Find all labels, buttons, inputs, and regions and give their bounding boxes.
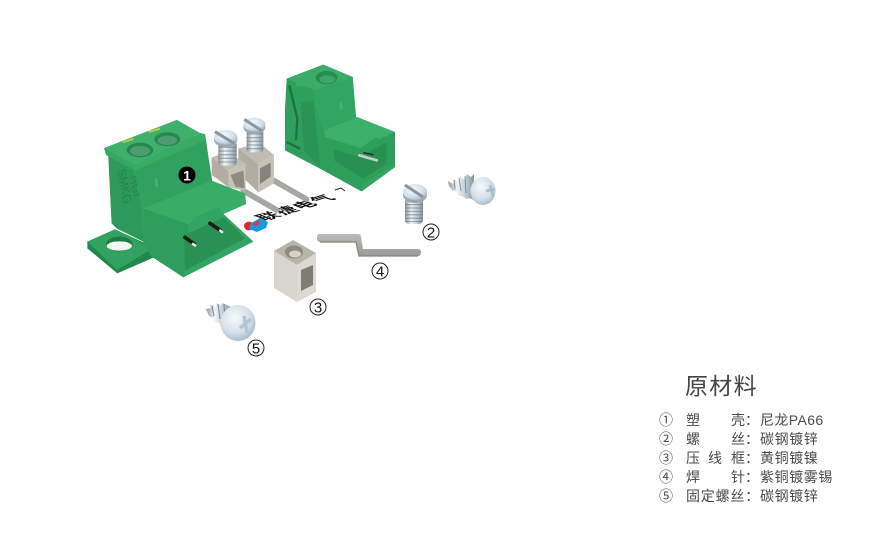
row 4 [659,469,833,485]
exploded terminal block view [87,65,496,358]
row 4: 焊 [686,469,700,485]
side face [108,155,143,242]
cage clamp right [238,143,274,192]
row 5 [659,488,818,504]
row 1: 塑 [686,412,700,428]
watermark logo [244,188,345,232]
shelf [324,117,395,148]
materials list [659,412,833,504]
front face [313,77,356,130]
row 2: 丝： [731,431,759,447]
part 3 marker: 3 [314,300,322,316]
row 2 [659,431,818,447]
row 1: ① [659,412,673,428]
top face [287,65,353,90]
tapping screw top right [448,174,496,205]
row 3: 压 [686,450,700,466]
row 2: ② [659,431,673,447]
top face [104,120,200,165]
part 3 marker [310,299,326,316]
row 5: 碳钢镀锌 [760,488,818,504]
part 1 marker [178,166,196,184]
row 2: 碳钢镀锌 [760,431,818,447]
tapping screw lower (part 5) [206,303,256,341]
pins [185,223,221,244]
cage clamp left [212,152,246,191]
part 2 marker: 2 [427,224,435,242]
rear metal parts in zoom frame [212,118,307,210]
socket [184,214,253,277]
slotted screw left [214,130,237,166]
heading: 原材料 [685,373,758,399]
green connector left (part 1) [87,120,253,277]
cutaway channel [301,101,321,169]
part 2 marker [423,224,439,242]
pin behind right [272,179,307,199]
front face [135,140,213,208]
terminal marks [123,129,160,142]
row 4: 紫铜镀雾锡 [760,469,833,485]
slotted screw (part 2) [403,184,427,224]
green connector left (part 1): HGI [127,174,145,198]
plug shelf [143,181,246,225]
solder pin (part 4) [317,234,421,256]
slotted screw right [243,118,265,152]
row 3: 黄铜镀镍 [760,450,818,466]
row 5: 固定螺丝： [686,488,760,504]
row 3: ③ [659,450,673,466]
wire cage (part 3) [274,240,316,302]
pin behind left [243,191,277,210]
row 1 [659,412,824,428]
part 5 marker: 5 [252,340,260,358]
green connector right (cutaway) [285,65,395,191]
part 4 marker: 4 [376,264,384,280]
silhouette [104,120,253,277]
part 5 marker [248,340,264,358]
row 5: ⑤ [659,488,673,504]
part 4 marker [372,263,388,280]
row 3 [659,450,818,466]
row 4: ④ [659,469,673,485]
screw wells [127,143,153,157]
row 3: 框： [731,450,759,466]
green connector left (part 1): SMKG [114,167,134,205]
mounting flange [87,229,154,273]
socket [322,133,395,191]
row 3: 线 [708,450,722,466]
row 1: 壳： [731,412,759,428]
row 2: 螺 [686,431,700,447]
row 1: 尼龙PA66 [760,412,824,428]
row 4: 针： [731,469,759,485]
part 1 marker: 1 [183,168,191,184]
watermark logo: 联捷电气 [251,193,341,222]
